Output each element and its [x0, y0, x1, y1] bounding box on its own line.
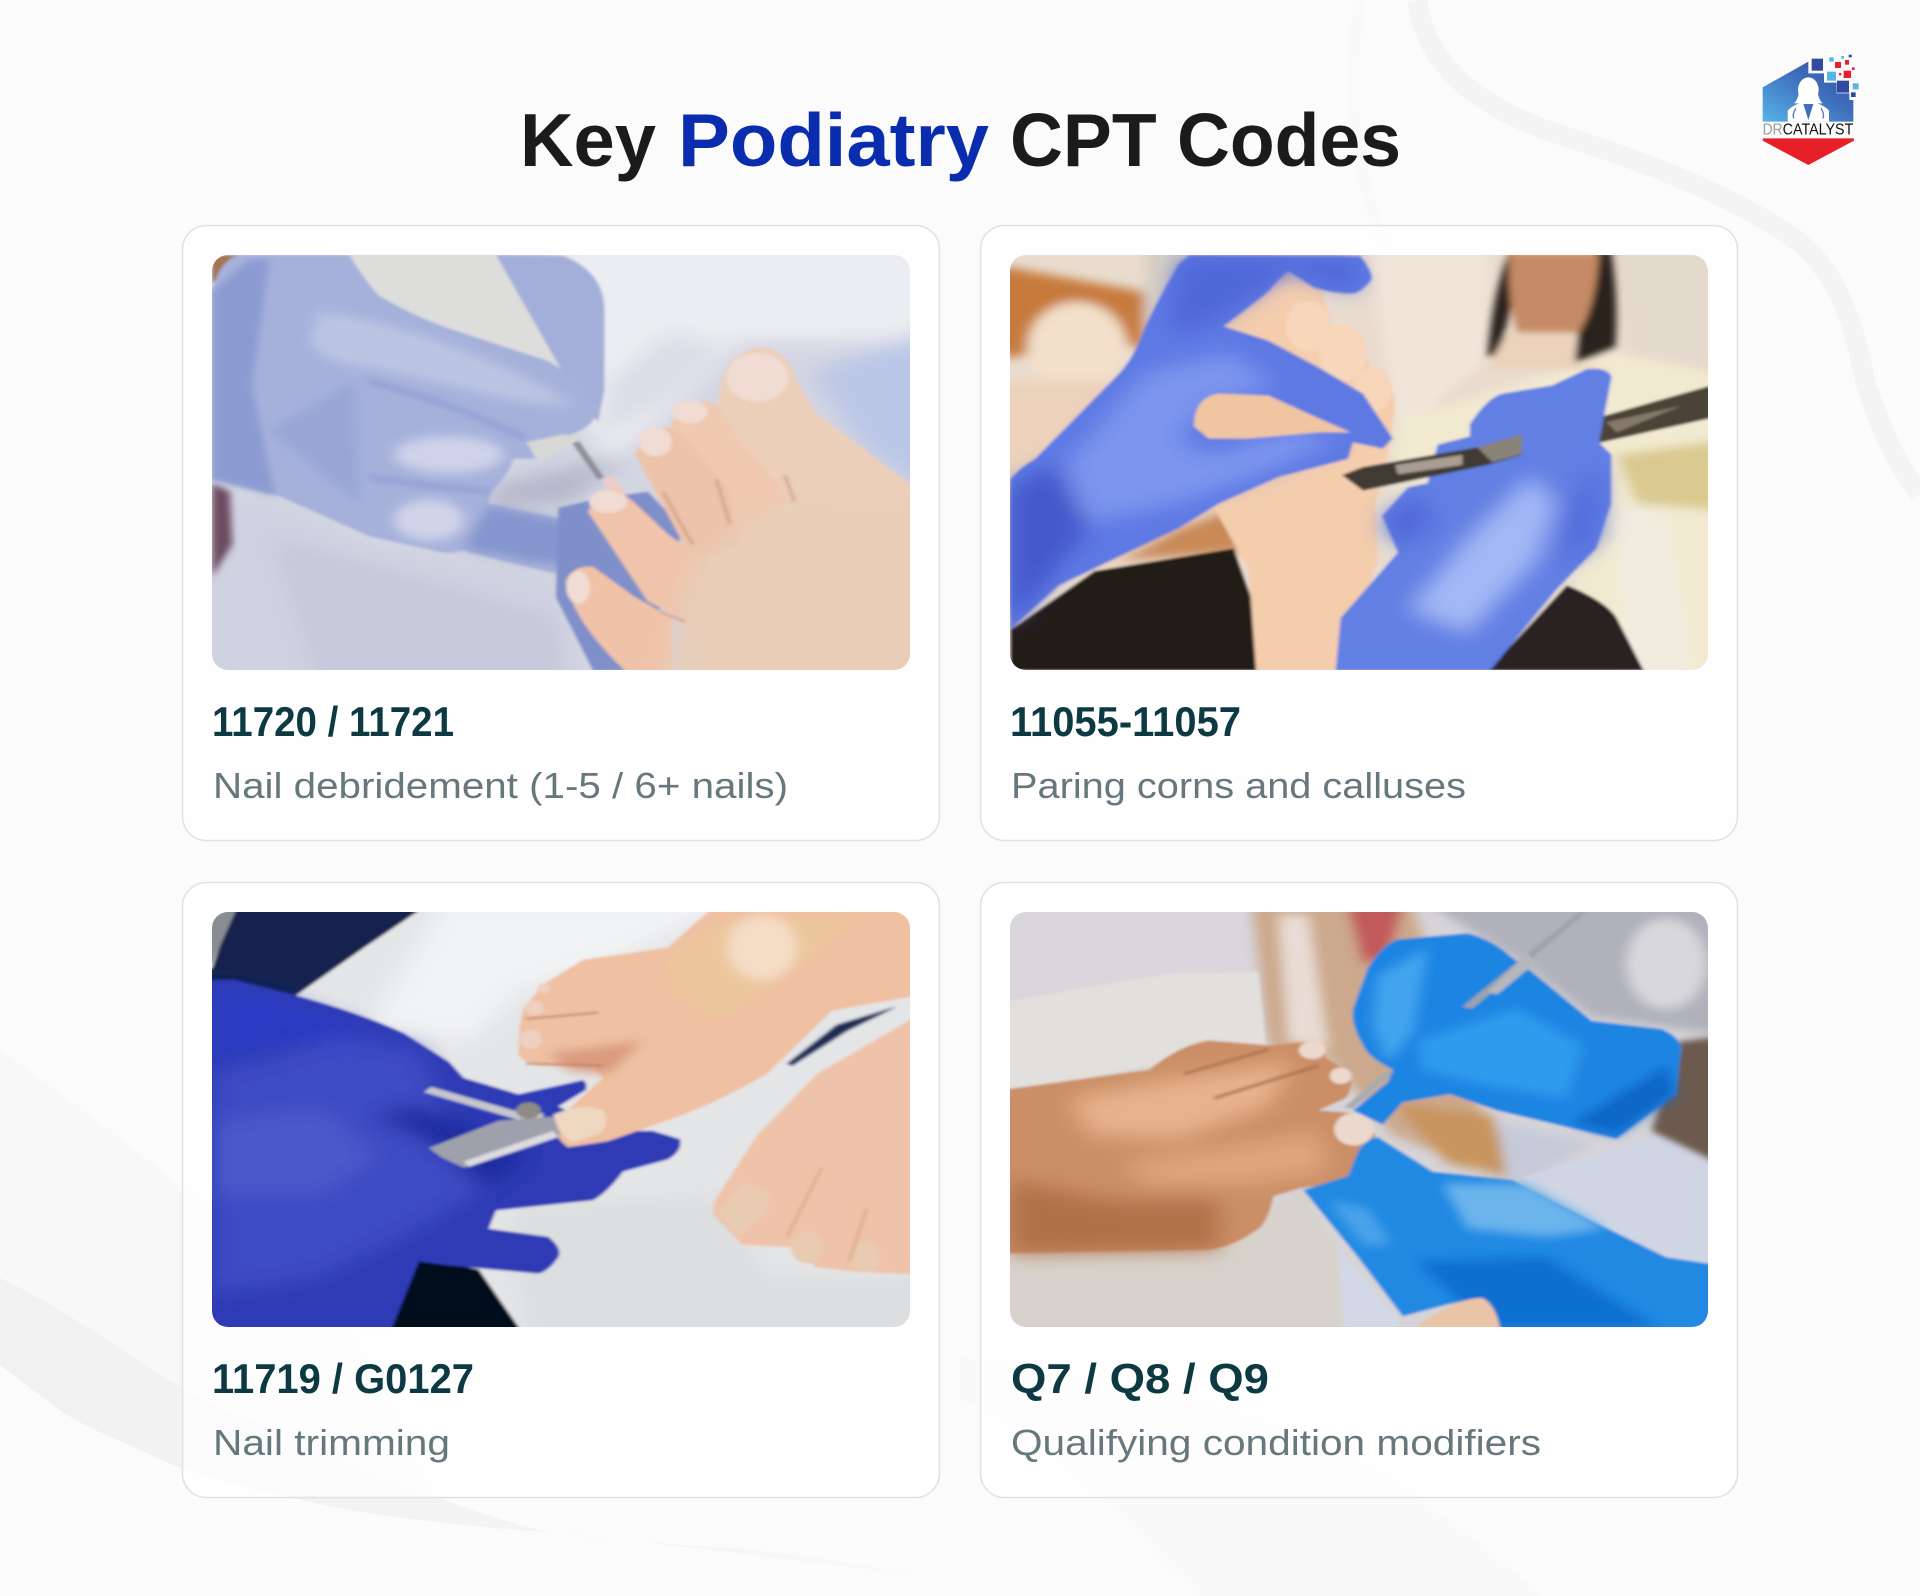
panel: 11719 / G0127	[182, 882, 940, 1498]
upper glove	[1353, 933, 1681, 1139]
foot	[1199, 272, 1395, 671]
code: 11720 / 11721	[212, 698, 454, 745]
scalpel handle	[1589, 385, 1711, 445]
glove under toes	[556, 491, 683, 671]
lower foot	[712, 1018, 910, 1276]
title	[520, 98, 1401, 182]
left glove	[1010, 255, 1393, 630]
panel: Q7 / Q8 / Q9	[980, 882, 1738, 1498]
panel: 11720 / 11721	[182, 226, 940, 840]
glove back	[496, 255, 605, 422]
code: Q7 / Q8 / Q9	[1011, 1355, 1269, 1402]
title: Podiatry	[678, 98, 989, 182]
foot	[985, 1040, 1375, 1254]
panel: 11055-11057	[980, 226, 1738, 840]
photo: gloved hands paring callus with scalpel	[1010, 255, 1708, 670]
logo hexagon with doctor	[1763, 55, 1859, 122]
towel	[1010, 972, 1266, 1088]
description: Paring corns and calluses	[1011, 765, 1466, 806]
logo red chevron	[1763, 138, 1854, 165]
photo: blue-gloved hands cleaning toenail	[1010, 912, 1708, 1327]
right glove	[1336, 369, 1612, 671]
title: CPT Codes	[1010, 98, 1401, 182]
scalpel blade	[1341, 446, 1523, 492]
description: Qualifying condition modifiers	[1011, 1422, 1541, 1463]
palm gap	[1194, 394, 1351, 438]
glove	[185, 980, 681, 1347]
title: Key	[520, 98, 656, 182]
pen	[350, 255, 554, 362]
navy jeans	[212, 912, 420, 998]
helper finger	[1414, 1295, 1503, 1327]
logo wordmark: DR	[1763, 121, 1783, 138]
lower glove	[1302, 1136, 1708, 1327]
nail clipper	[424, 1087, 561, 1168]
logo: Dr Catalyst	[1762, 54, 1859, 165]
description: Nail trimming	[213, 1422, 450, 1463]
code: 11719 / G0127	[212, 1355, 474, 1402]
description: Nail debridement (1-5 / 6+ nails)	[213, 765, 788, 806]
code: 11055-11057	[1010, 698, 1241, 745]
logo wordmark: CATALYST	[1783, 121, 1854, 138]
cuticle tool	[1462, 912, 1587, 1009]
upper foot	[517, 912, 910, 1150]
photo: glove holding nail drill on toe	[212, 255, 910, 670]
foot	[704, 346, 910, 564]
photo: gloved hand trimming toenail with clipper	[212, 912, 910, 1327]
drill tip	[526, 434, 583, 460]
